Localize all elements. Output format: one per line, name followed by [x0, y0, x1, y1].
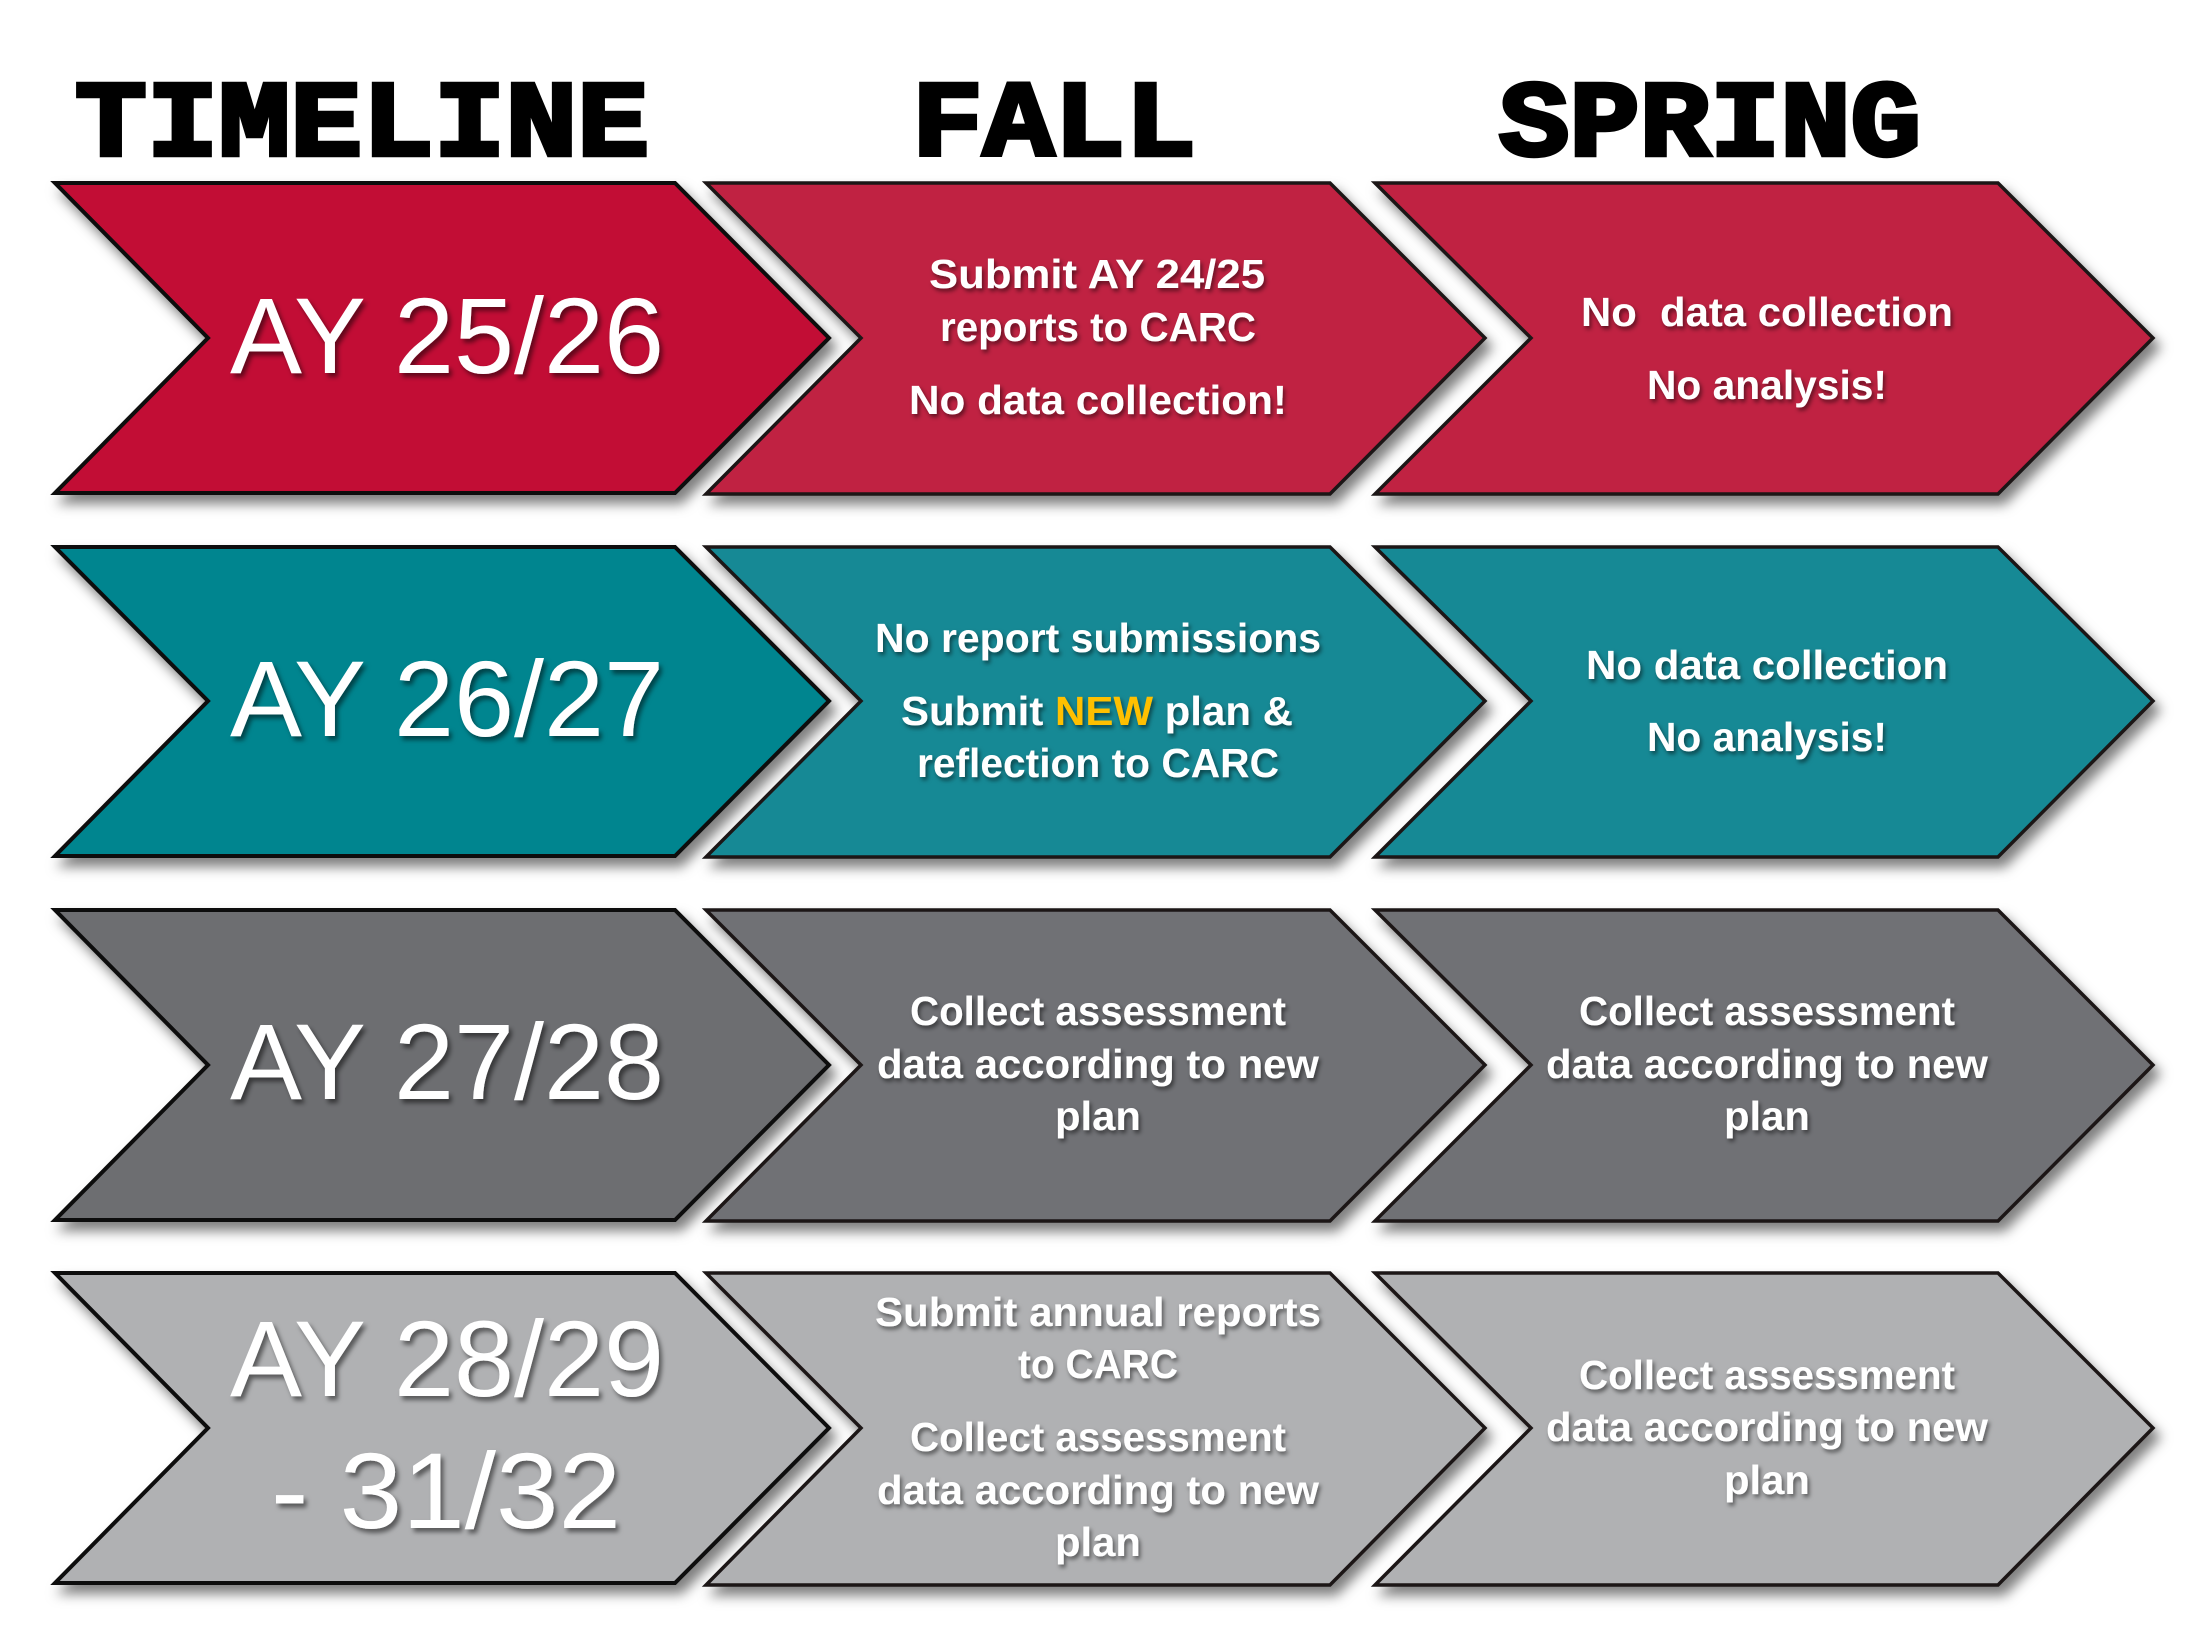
chevron: spring AY 27/28: plan — [1724, 1093, 1810, 1139]
chevron: fall AY 27/28 — [706, 910, 1485, 1221]
chevron: fall AY 28/29 - 31/32: plan — [1055, 1519, 1141, 1565]
row 1: AY 25/26 — [55, 183, 2153, 494]
chevron: fall AY 28/29 - 31/32 — [706, 1273, 1485, 1585]
chevron: spring AY 26/27: No analysis! — [1647, 714, 1887, 760]
chevron: spring AY 25/26 — [1375, 183, 2153, 494]
heading: SPRING: SPRING — [1499, 66, 1921, 188]
chevron: fall AY 27/28: Collect assessment — [910, 988, 1286, 1034]
chevron: fall AY 26/27: No report submissions — [875, 615, 1321, 661]
chevron: fall AY 25/26: Submit AY 24/25 — [929, 251, 1265, 297]
chevron: AY 28/29 - 31/32 label: - 31/32 — [271, 1430, 621, 1551]
chevron: fall AY 25/26: reports to CARC — [940, 304, 1256, 350]
row 4: AY 28/29 - 31/32 — [55, 1273, 2153, 1585]
chevron: fall AY 25/26 — [706, 183, 1485, 494]
chevron: spring AY 28/29 - 31/32 — [1375, 1273, 2153, 1585]
heading: FALL: FALL — [912, 66, 1196, 188]
chevron: fall AY 27/28: plan — [1055, 1093, 1141, 1139]
chevron: spring AY 27/28: data according to new — [1546, 1041, 1988, 1087]
chevron: fall AY 26/27: Submit NEW plan & — [901, 688, 1293, 734]
chevron: AY 26/27 label: AY 26/27 — [230, 638, 664, 759]
chevron: AY 28/29 - 31/32 label — [55, 1273, 829, 1583]
chevron: spring AY 27/28 — [1375, 910, 2153, 1221]
heading: TIMELINE: TIMELINE — [75, 66, 649, 188]
row 2: AY 26/27 — [55, 547, 2153, 857]
chevron: fall AY 28/29 - 31/32: Submit annual reports — [875, 1289, 1321, 1335]
chevron: spring AY 25/26: No analysis! — [1647, 362, 1887, 408]
chevron: AY 25/26 label — [55, 183, 829, 493]
chevron: spring AY 26/27: No data collection — [1586, 642, 1948, 688]
chevron: spring AY 26/27 — [1375, 547, 2153, 857]
chevron: AY 25/26 label: AY 25/26 — [230, 275, 664, 396]
chevron: AY 28/29 - 31/32 label: AY 28/29 — [230, 1298, 664, 1419]
chevron: spring AY 27/28: Collect assessment — [1579, 988, 1955, 1034]
chevron: fall AY 28/29 - 31/32: to CARC — [1018, 1341, 1178, 1387]
chevron: fall AY 26/27 — [706, 547, 1485, 857]
row 3: AY 27/28 — [55, 910, 2153, 1221]
chevron: spring AY 28/29 - 31/32: Collect assessment — [1579, 1352, 1955, 1398]
chevron: fall AY 25/26: No data collection! — [909, 377, 1287, 423]
chevron: spring AY 28/29 - 31/32: data according to new — [1546, 1404, 1988, 1450]
chevron: fall AY 27/28: data according to new — [877, 1041, 1319, 1087]
chevron: AY 27/28 label: AY 27/28 — [230, 1001, 664, 1122]
chevron: AY 27/28 label — [55, 910, 829, 1220]
chevron: fall AY 28/29 - 31/32: data according to new — [877, 1467, 1319, 1513]
chevron: AY 26/27 label — [55, 547, 829, 856]
chevron: fall AY 28/29 - 31/32: Collect assessment — [910, 1414, 1286, 1460]
chevron: fall AY 26/27: reflection to CARC — [917, 740, 1279, 786]
chevron: spring AY 25/26: No data collection — [1581, 289, 1953, 335]
chevron: spring AY 28/29 - 31/32: plan — [1724, 1457, 1810, 1503]
